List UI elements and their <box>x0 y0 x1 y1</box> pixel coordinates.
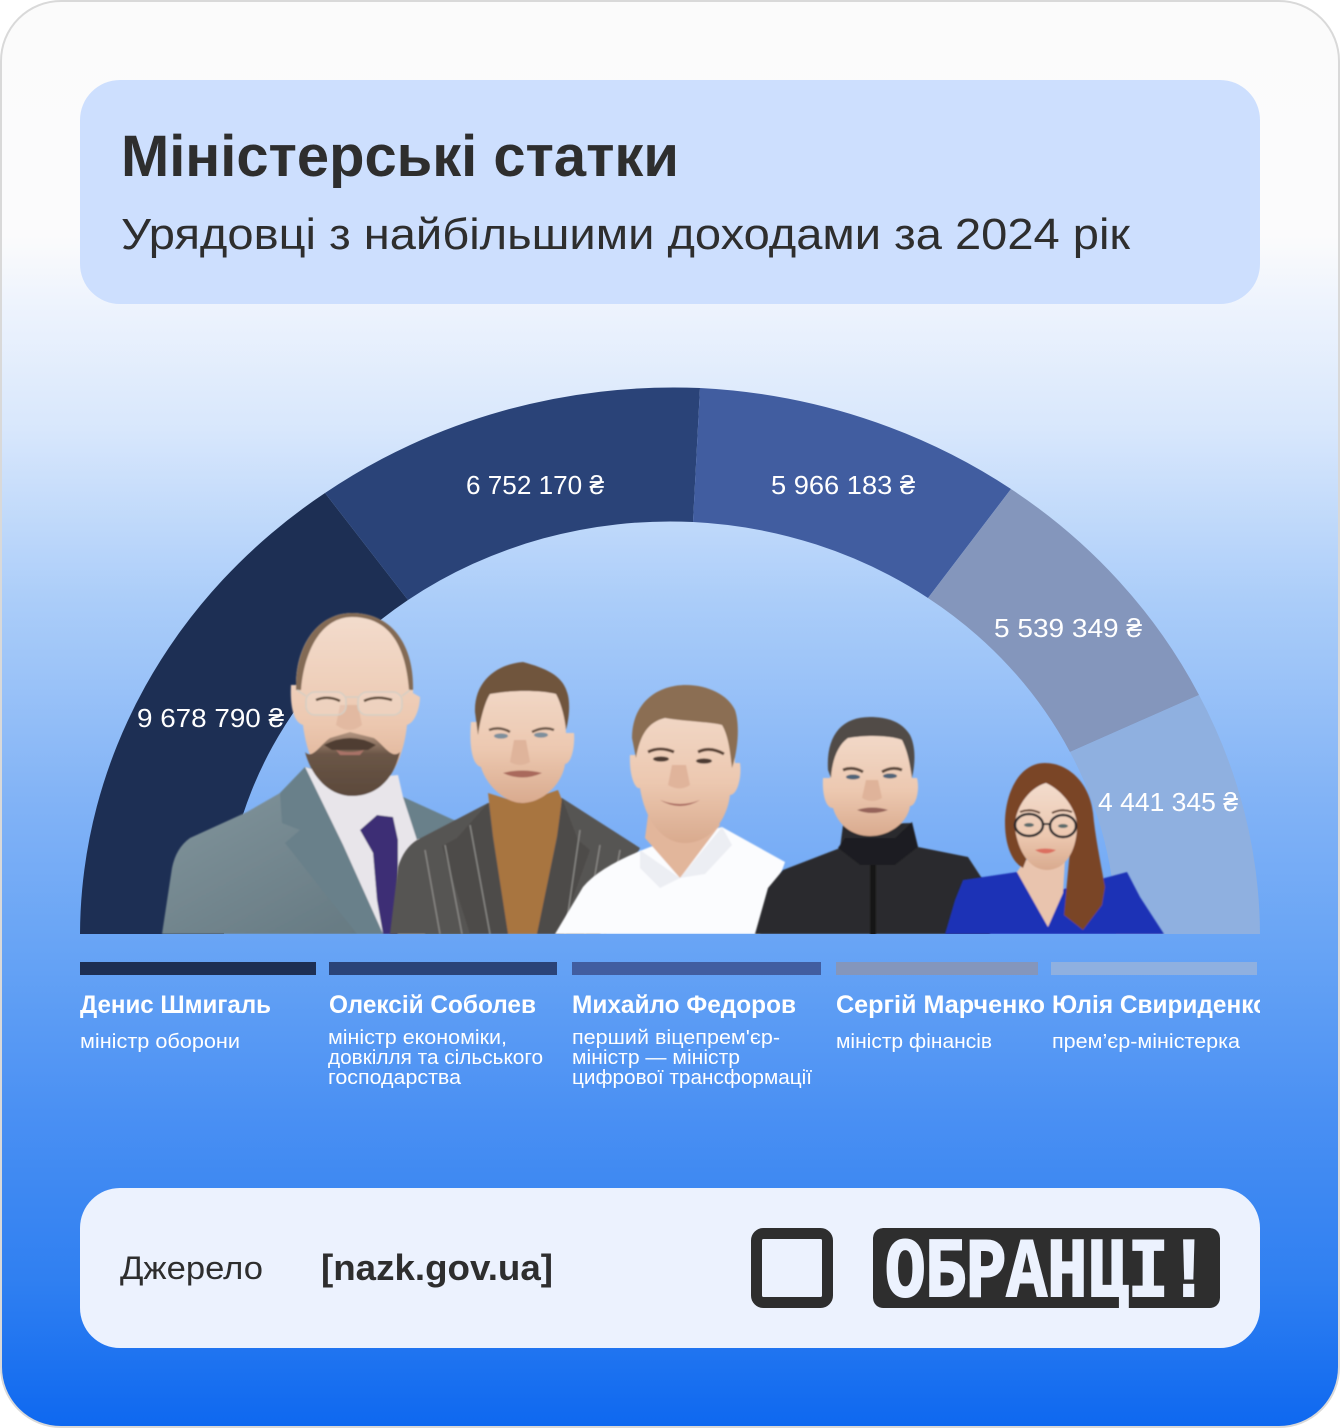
value: Соболев: 6 752 170 ₴ <box>466 470 605 500</box>
legend: Шмигаль <box>80 962 316 1053</box>
segment: Соболев <box>325 387 700 600</box>
legend: Соболев: господарства <box>328 1067 462 1089</box>
legend: Свириденко: прем’єр-міністерка <box>1052 1031 1241 1053</box>
legend: Марченко <box>836 962 1045 1053</box>
legend: Соболев: міністр економіки, <box>328 1027 507 1049</box>
legend: Федоров: цифрової трансформації <box>572 1067 812 1089</box>
legend: Федоров: міністр — міністр <box>572 1047 740 1069</box>
legend: Федоров: перший віцепрем'єр- <box>572 1027 780 1049</box>
portrait: Соболев <box>390 662 640 934</box>
legend: Соболев <box>328 962 557 1089</box>
portrait: Шмигаль <box>162 613 470 934</box>
legend: Соболев: довкілля та сільського <box>328 1047 543 1069</box>
legend: Марченко: Сергій Марченко <box>836 991 1045 1019</box>
source label: Джерело <box>120 1250 263 1286</box>
segment: Шмигаль <box>80 493 408 934</box>
source link: [nazk.gov.ua] <box>321 1247 553 1288</box>
legend: Свириденко <box>1051 962 1268 1053</box>
value: Шмигаль: 9 678 790 ₴ <box>137 703 285 733</box>
portraits <box>162 613 1164 935</box>
portrait: Свириденко <box>945 763 1164 934</box>
segment: Марченко <box>928 489 1199 752</box>
icon: logo square <box>756 1234 828 1302</box>
legend: Марченко: міністр фінансів <box>836 1031 992 1053</box>
value: Марченко: 5 539 349 ₴ <box>994 613 1143 643</box>
title: Міністерські статки <box>121 124 679 189</box>
value: Свириденко: 4 441 345 ₴ <box>1098 787 1239 817</box>
portrait: Федоров <box>555 685 785 934</box>
legend: Шмигаль: Денис Шмигаль <box>80 991 271 1019</box>
legend: Федоров <box>572 962 821 1089</box>
subtitle: Урядовці з найбільшими доходами за 2024 рік <box>121 210 1131 259</box>
panel: header <box>80 80 1260 304</box>
panel: footer <box>80 1188 1260 1348</box>
logo: wordmark: ОБРАНЦІ! <box>885 1227 1209 1322</box>
segment: Федоров <box>693 388 1011 598</box>
legend: Шмигаль: міністр оборони <box>80 1031 240 1053</box>
value: Федоров: 5 966 183 ₴ <box>771 470 916 500</box>
legend: Федоров: Михайло Федоров <box>572 991 796 1019</box>
portrait: Марченко <box>755 717 990 935</box>
legend: Свириденко: Юлія Свириденко <box>1052 991 1268 1019</box>
segment: Свириденко <box>1070 695 1260 934</box>
legend: Соболев: Олексій Соболев <box>329 991 536 1019</box>
logo: wordmark <box>873 1228 1220 1308</box>
chart: income half ring <box>80 387 1260 934</box>
